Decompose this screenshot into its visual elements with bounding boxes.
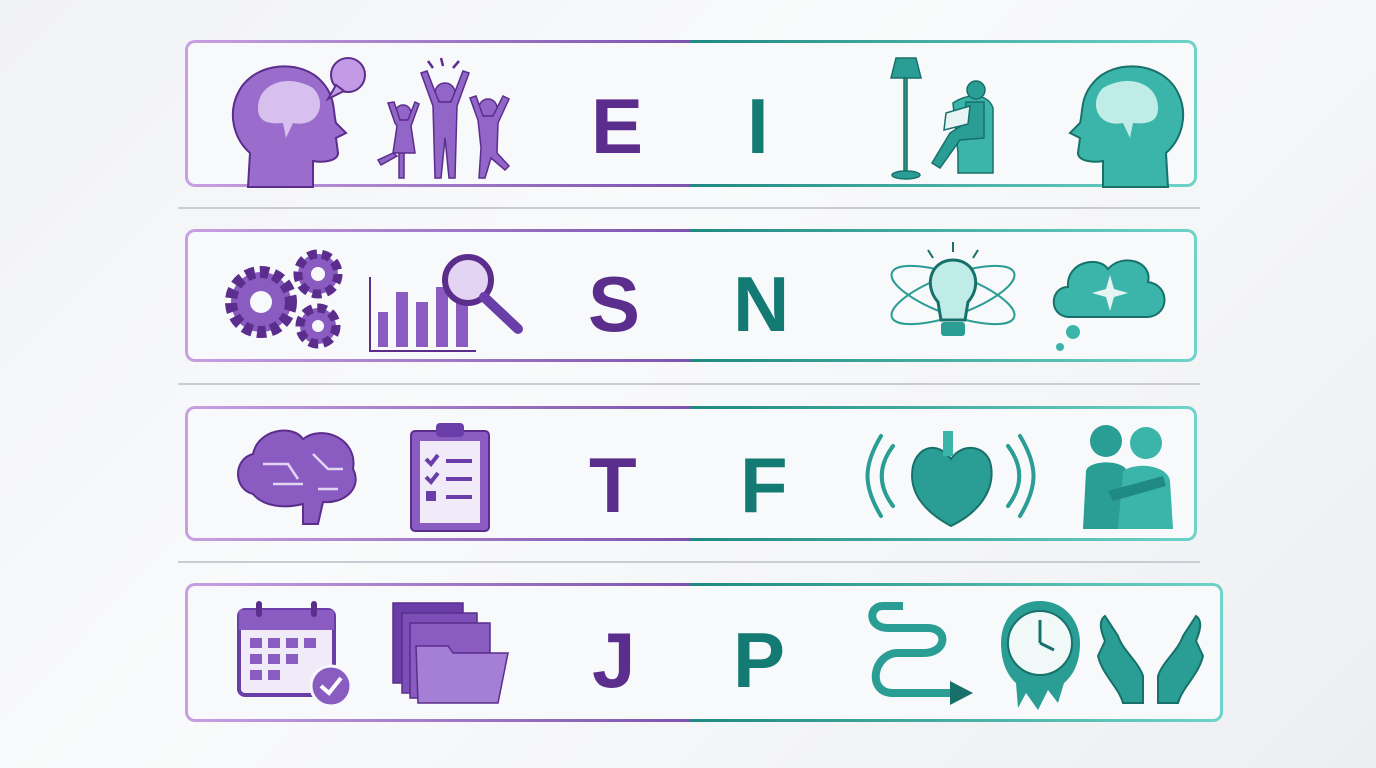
icon: hugging people bbox=[1083, 425, 1173, 529]
icon: lightbulb with orbits bbox=[890, 242, 1016, 336]
icon: floor lamp and reader in armchair bbox=[890, 57, 994, 180]
icon: calendar with check bbox=[237, 601, 350, 704]
icon: melting clock bbox=[1001, 601, 1080, 710]
icon: extravert head with speech bubble bbox=[232, 57, 366, 188]
icon: cheering people bbox=[377, 58, 510, 179]
letter I: I bbox=[747, 82, 769, 170]
letter E: E bbox=[591, 82, 643, 170]
letter T: T bbox=[589, 441, 637, 529]
icon: folders bbox=[392, 602, 509, 704]
panel: E / I bbox=[185, 40, 1197, 187]
letter S: S bbox=[588, 260, 640, 348]
letter P: P bbox=[733, 616, 785, 704]
panel: T / F bbox=[185, 406, 1197, 541]
letter N: N bbox=[733, 260, 789, 348]
icon: thought cloud with sparkles bbox=[1052, 259, 1166, 351]
icon: bar chart with magnifier bbox=[369, 254, 523, 352]
icon: circuit brain bbox=[237, 430, 357, 525]
letter F: F bbox=[740, 441, 788, 529]
panel: J / P bbox=[185, 583, 1223, 722]
panel: S / N bbox=[185, 229, 1197, 362]
icon: heart with waves bbox=[866, 431, 1036, 528]
icon: winding arrow bbox=[868, 602, 973, 705]
letter J: J bbox=[592, 616, 635, 704]
icon: gears bbox=[225, 250, 342, 348]
icon: open hands bbox=[1096, 614, 1204, 704]
icon: introvert head bbox=[1068, 65, 1184, 188]
icon: clipboard checklist bbox=[410, 423, 490, 532]
